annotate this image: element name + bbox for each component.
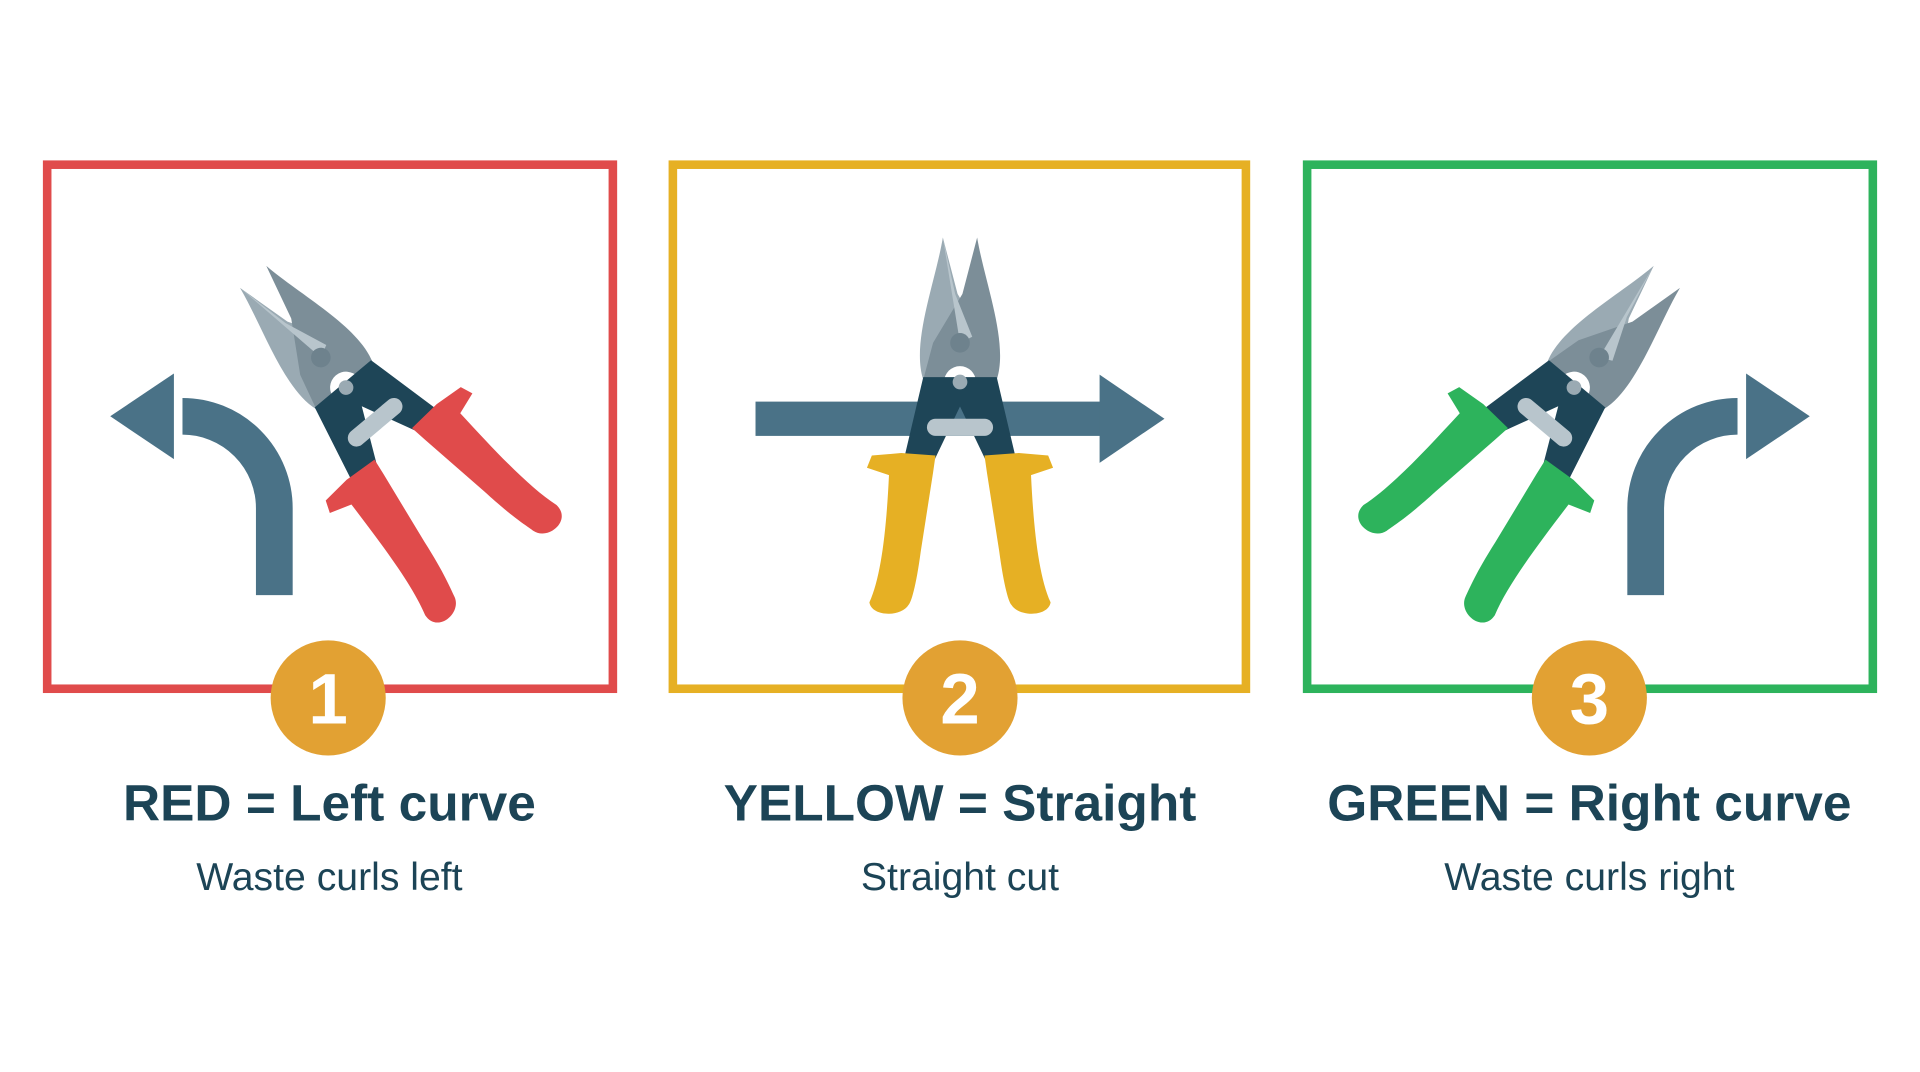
badge 3 bbox=[1532, 640, 1647, 755]
text: straight cut: Straight cut bbox=[861, 856, 1059, 899]
frame yellow bbox=[673, 165, 1246, 689]
text: waste curls left: Waste curls left bbox=[196, 856, 463, 899]
icon: green pliers bbox=[1347, 217, 1738, 633]
panel: red left curve bbox=[47, 165, 613, 899]
arrow: right curve bbox=[1646, 373, 1810, 595]
heading: GREEN = Right curve: GREEN = Right curve bbox=[1327, 773, 1851, 831]
badge 1 bbox=[271, 640, 386, 755]
badge 2 bbox=[902, 640, 1018, 755]
heading: YELLOW = Straight: YELLOW = Straight bbox=[724, 773, 1196, 831]
badge 1: 1 bbox=[308, 661, 348, 740]
badge 2: 2 bbox=[940, 661, 980, 740]
arrow: straight bbox=[756, 375, 1164, 463]
heading: RED = Left curve: RED = Left curve bbox=[123, 773, 536, 831]
icon: red pliers bbox=[182, 217, 573, 633]
frame green bbox=[1307, 165, 1873, 689]
panel: green right curve bbox=[1307, 165, 1873, 899]
text: waste curls right: Waste curls right bbox=[1444, 856, 1735, 899]
icon: yellow pliers bbox=[867, 238, 1053, 614]
arrow: left curve bbox=[110, 373, 274, 595]
frame red bbox=[47, 165, 613, 689]
badge 3: 3 bbox=[1570, 661, 1609, 740]
panel: yellow straight bbox=[673, 165, 1246, 899]
